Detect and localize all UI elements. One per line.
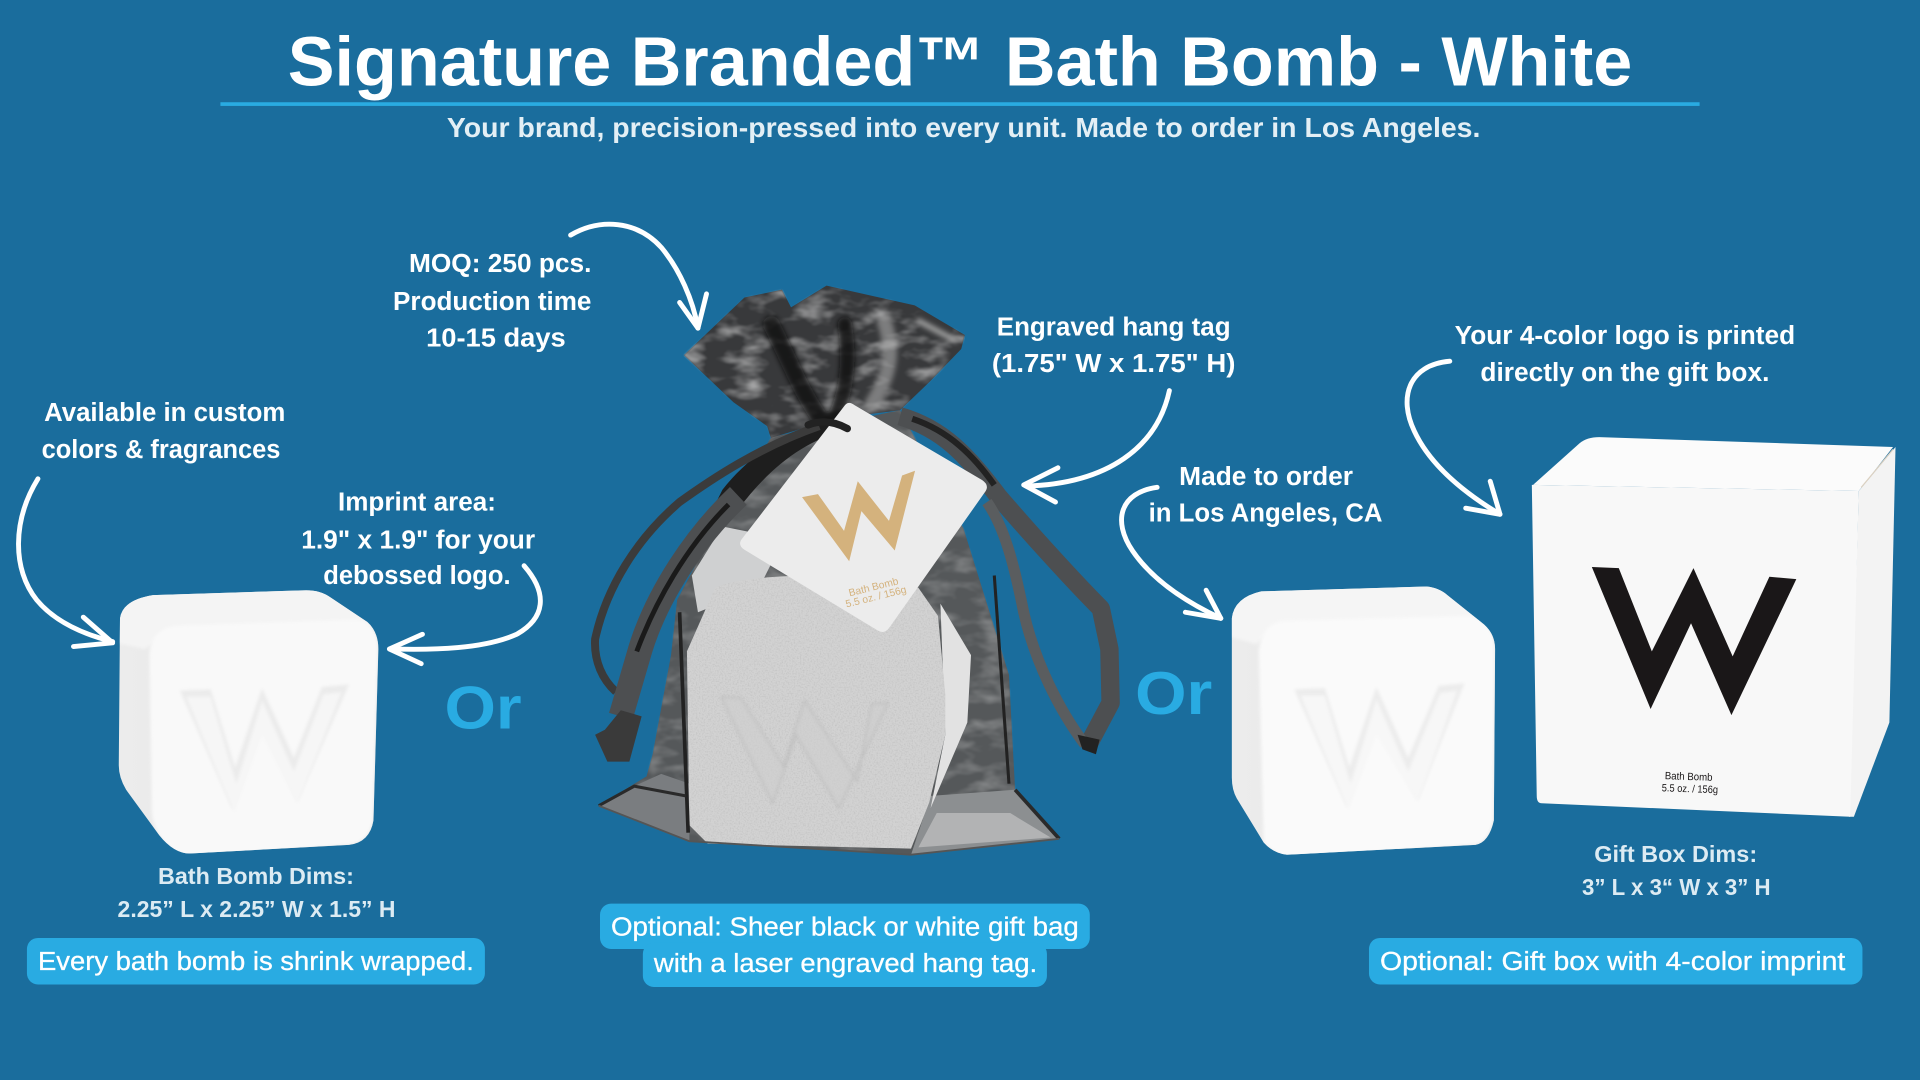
callout: MOQ and production time: MOQ: 250 pcs. <box>409 250 591 278</box>
callout: MOQ and production time <box>393 250 591 353</box>
debossed logo <box>1294 683 1464 811</box>
bomb front face <box>1259 616 1495 858</box>
box small print: 5.5 oz. / 156g <box>1662 782 1718 796</box>
callout: engraved hang tag: Engraved hang tag <box>997 314 1231 342</box>
bag right fold <box>931 604 971 808</box>
badge: shrink wrapped <box>27 938 485 984</box>
pale area above bomb <box>692 527 784 612</box>
badge: optional gift bag: Optional: Sheer black or white gift bag <box>611 912 1079 942</box>
bomb shading <box>116 588 382 857</box>
badge: optional gift bag: with a laser engraved hang tag. <box>653 948 1037 978</box>
dimensions: gift box: 3” L x 3“ W x 3” H <box>1582 874 1771 900</box>
product: gift box <box>1532 437 1896 817</box>
right ribbon wide <box>900 416 1111 742</box>
dimensions: bath bomb: Bath Bomb Dims: <box>158 863 354 889</box>
bag bottom panels <box>599 774 689 841</box>
title: Signature Branded™ Bath Bomb - White <box>288 23 1632 101</box>
gold logo on tag <box>802 471 915 561</box>
arrow: to gift box <box>1407 361 1500 514</box>
callout: made to order: Made to order <box>1179 463 1353 491</box>
badge: optional gift bag <box>600 904 1090 987</box>
callout: imprint area: debossed logo. <box>323 562 511 590</box>
dimensions: bath bomb: 2.25” L x 2.25” W x 1.5” H <box>118 896 396 922</box>
callout: gift box logo print <box>1455 322 1795 387</box>
bomb body side <box>1232 587 1495 855</box>
subtitle: Your brand, precision-pressed into every unit. Made to order in Los Angeles. <box>447 112 1480 143</box>
product: gift bag with bath bomb and hang tag <box>595 286 1111 855</box>
label: Or left: Or <box>444 675 522 742</box>
bomb shading <box>1229 583 1499 858</box>
bath bomb inside bag <box>687 576 945 849</box>
label: Or right: Or <box>1135 660 1212 727</box>
left ribbon thin <box>595 426 819 692</box>
left ribbon wide <box>621 496 738 716</box>
bomb body side <box>119 590 378 853</box>
dimensions: gift box <box>1582 841 1771 900</box>
callout: gift box logo print: Your 4-color logo is printed <box>1455 322 1795 350</box>
hang tag <box>740 403 987 632</box>
arrow: hang tag <box>1024 391 1169 502</box>
callout: imprint area <box>301 489 535 590</box>
badge: shrink wrapped: Every bath bomb is shrink wrapped. <box>38 946 474 976</box>
right ribbon tail <box>987 502 1085 744</box>
bomb front face <box>149 620 378 857</box>
product: bath bomb right <box>1229 583 1499 858</box>
bomb top face <box>120 590 373 646</box>
arrow: imprint to bomb <box>389 566 540 664</box>
tag string knot <box>808 422 847 429</box>
bag seams <box>680 612 688 833</box>
bomb top face <box>1232 586 1482 642</box>
callout: imprint area: 1.9" x 1.9" for your <box>301 527 535 555</box>
callout: imprint area: Imprint area: <box>338 489 496 517</box>
dimensions: bath bomb <box>118 863 396 922</box>
ruffle folds <box>771 321 955 422</box>
box small print <box>1662 770 1718 796</box>
callout: custom colors: Available in custom <box>44 399 285 427</box>
callout: MOQ and production time: Production time <box>393 288 591 316</box>
callout: made to order <box>1149 463 1382 528</box>
arrow: MOQ to bag <box>571 224 707 328</box>
sheer bag body <box>599 410 1059 855</box>
debossed logo <box>180 684 349 813</box>
badge: optional gift box <box>1369 938 1862 984</box>
box front <box>1532 485 1859 817</box>
callout: engraved hang tag: (1.75" W x 1.75" H) <box>992 350 1236 378</box>
callout: engraved hang tag <box>992 314 1236 378</box>
callout: gift box logo print: directly on the gift box. <box>1480 359 1769 387</box>
product: bath bomb left <box>116 588 382 857</box>
badge: optional gift box: Optional: Gift box with 4-color imprint <box>1380 946 1846 976</box>
dimensions: gift box: Gift Box Dims: <box>1594 841 1757 867</box>
tag small print: Bath Bomb <box>848 576 900 599</box>
arrow: to right bomb <box>1122 487 1221 618</box>
tag small print: 5.5 oz. / 156g <box>845 585 908 610</box>
box small print: Bath Bomb <box>1665 770 1713 784</box>
arrow: custom colors to bomb <box>19 479 113 647</box>
box side <box>1849 447 1896 817</box>
callout: made to order: in Los Angeles, CA <box>1149 500 1382 528</box>
printed logo <box>1592 567 1796 715</box>
callout: custom colors <box>42 399 285 464</box>
bag gather ruffle <box>684 286 965 438</box>
callout: MOQ and production time: 10-15 days <box>426 325 566 353</box>
debossed logo on bagged bomb <box>721 697 888 808</box>
box top flap <box>1533 437 1893 491</box>
neck gather <box>704 418 845 527</box>
callout: custom colors: colors & fragrances <box>42 436 280 464</box>
